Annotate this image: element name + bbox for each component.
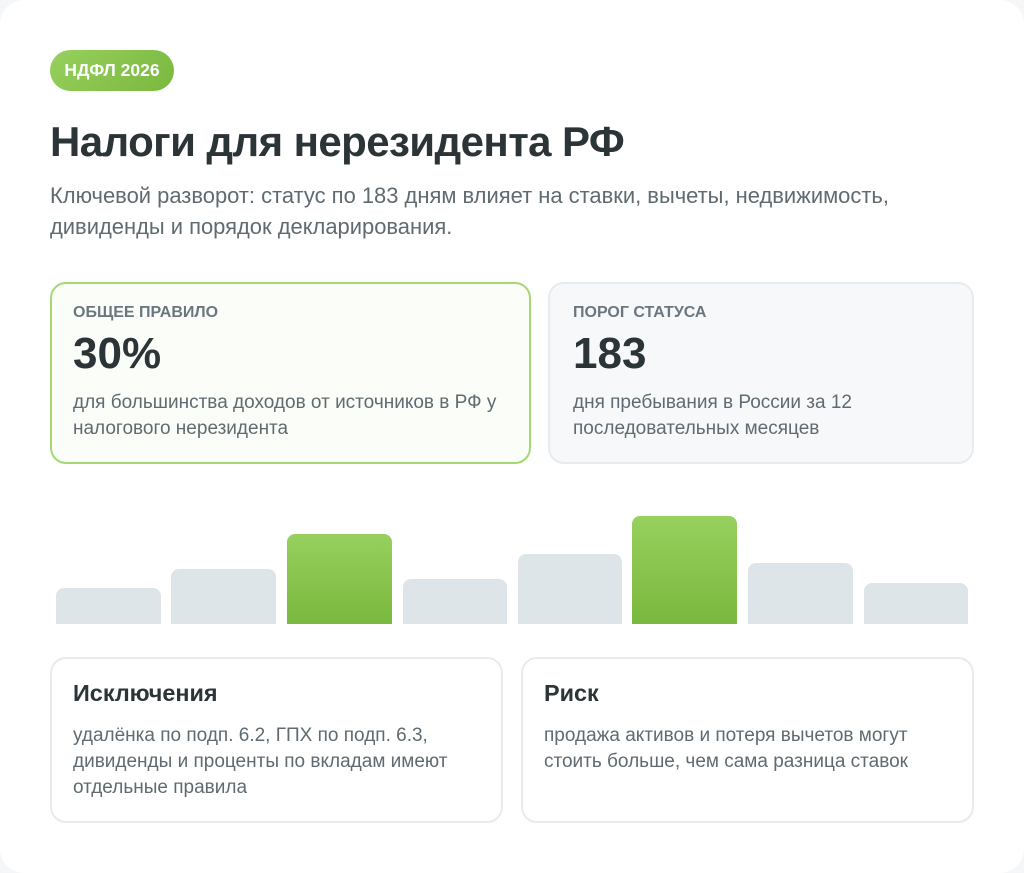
- text: risk: [544, 725, 908, 772]
- panel: risk: [521, 657, 974, 823]
- label: status threshold: ПОРОГ СТАТУСА: [573, 304, 706, 321]
- label: general rule: ОБЩЕЕ ПРАВИЛО: [73, 304, 218, 321]
- text: exceptions: отдельные правила: [73, 777, 247, 798]
- text: exceptions: [73, 725, 448, 798]
- stat: 30%: 30%: [73, 329, 161, 378]
- panel: general rule: [50, 282, 531, 464]
- heading: exceptions: Исключения: [73, 680, 218, 706]
- panel: status threshold: [548, 282, 974, 464]
- text: risk: продажа активов и потеря вычетов могут: [544, 725, 908, 746]
- text: risk: стоить больше, чем сама разница ставок: [544, 751, 908, 772]
- description: general rule: для большинства доходов от источников в РФ у: [73, 392, 496, 413]
- title: Налоги для нерезидента РФ: [50, 118, 624, 165]
- description: general rule: [73, 392, 496, 439]
- text: exceptions: удалёнка по подп. 6.2, ГПХ по подп. 6.3,: [73, 725, 428, 746]
- stat: 183: 183: [573, 329, 646, 378]
- badge: НДФЛ 2026: НДФЛ 2026: [64, 60, 160, 80]
- description: status threshold: [573, 392, 852, 439]
- description: status threshold: дня пребывания в России за 12: [573, 392, 852, 413]
- subtitle: [50, 183, 889, 239]
- badge: НДФЛ 2026: [50, 50, 174, 91]
- description: general rule: налогового нерезидента: [73, 418, 288, 439]
- subtitle: Ключевой разворот: статус по 183 дням влияет на ставки, вычеты, недвижимость,: [50, 183, 889, 208]
- description: status threshold: последовательных месяцев: [573, 418, 819, 439]
- panel: exceptions: [50, 657, 503, 823]
- subtitle: дивиденды и порядок декларирования.: [50, 214, 452, 239]
- text: exceptions: дивиденды и проценты по вкладам имеют: [73, 751, 447, 772]
- heading: risk: Риск: [544, 680, 599, 706]
